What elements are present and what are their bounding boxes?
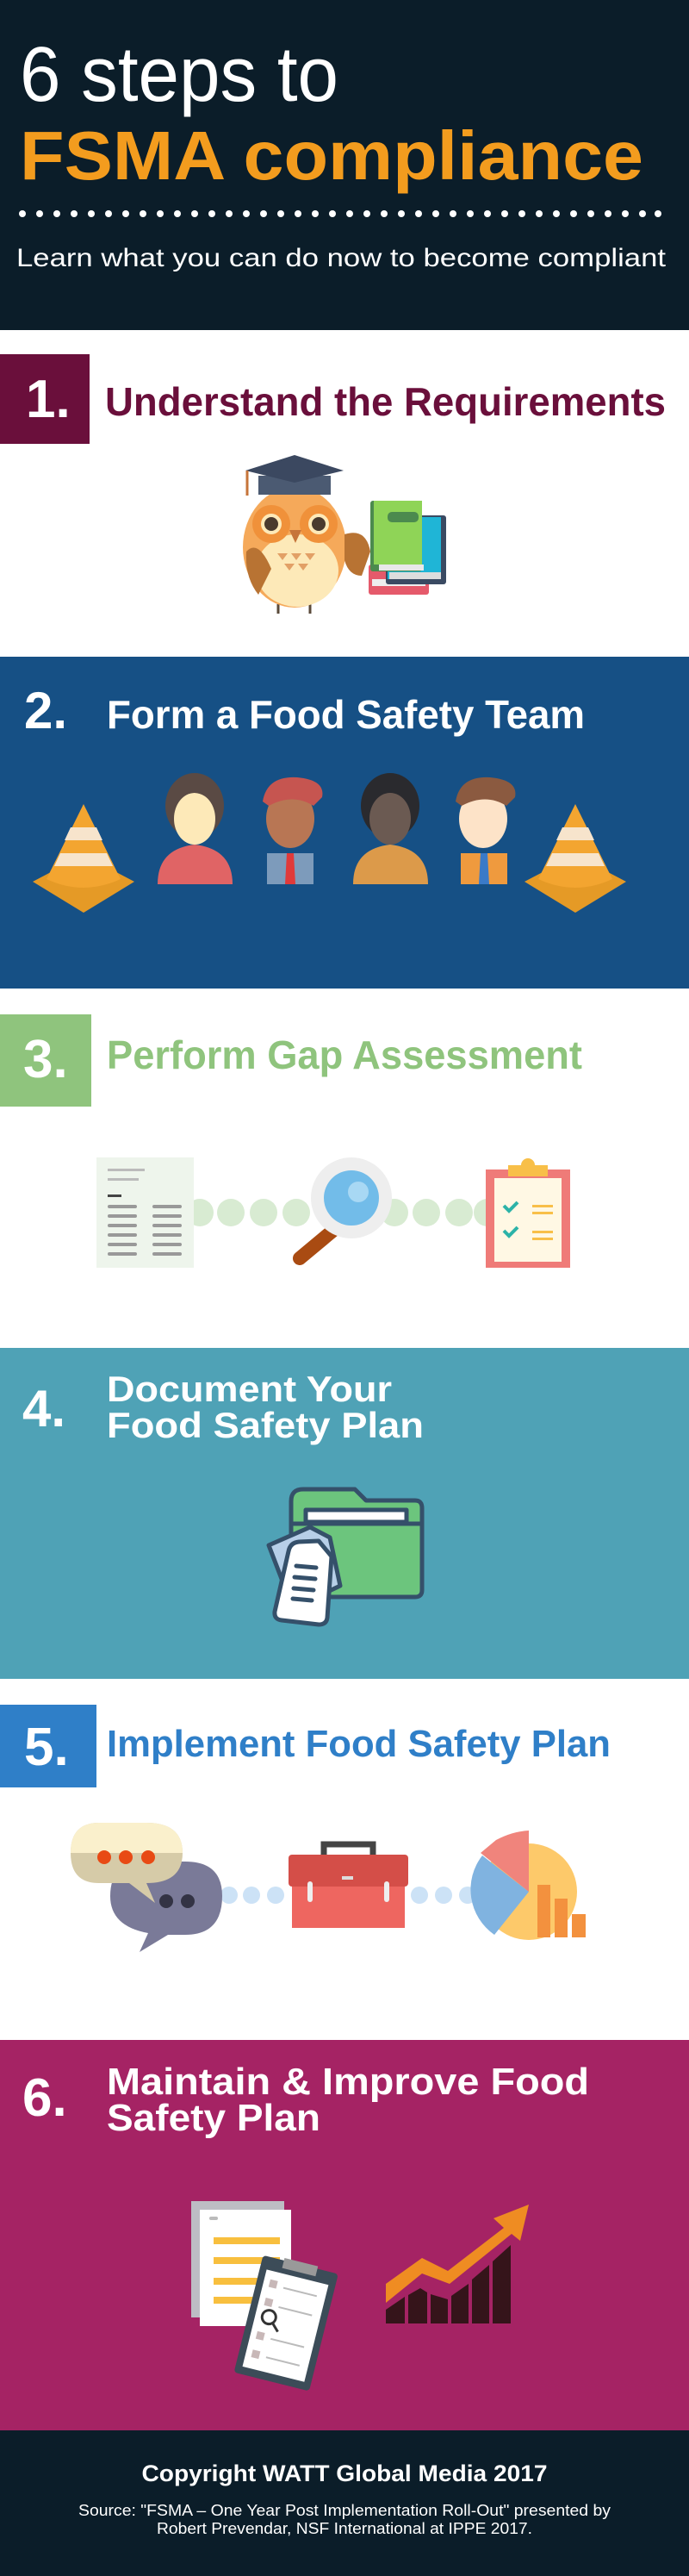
icon: woman 2 [353, 773, 428, 884]
heading 4: Document Your [107, 1369, 392, 1409]
dotted divider [19, 210, 661, 217]
icon: chat bubbles [71, 1823, 222, 1952]
icon: magnifier [300, 1157, 392, 1258]
header panel [0, 0, 689, 330]
icon: rising bar chart with arrow [386, 2205, 529, 2323]
heading 4 [22, 1369, 424, 1445]
heading 5: Implement Food Safety Plan [107, 1723, 611, 1765]
connector dots [186, 1199, 501, 1226]
panel: step 3 [0, 989, 689, 1348]
heading 2: 2. [24, 682, 67, 739]
step number box 3: 3. [23, 1030, 68, 1089]
title line 1: 6 steps to [20, 32, 338, 118]
icon: woman 1 [158, 773, 233, 884]
icon: man 2 [456, 777, 515, 884]
heading 4: Food Safety Plan [107, 1405, 424, 1445]
heading 6: 6. [22, 2068, 67, 2128]
heading 6: Safety Plan [107, 2097, 320, 2139]
panel: step 6 [0, 2040, 689, 2430]
icon: left cone [33, 804, 134, 913]
heading 4: 4. [22, 1380, 65, 1438]
icon: owl with graduation cap [243, 455, 370, 614]
step number box 5: 5. [24, 1718, 69, 1777]
icon: pie and bar chart [470, 1831, 586, 1940]
subtitle: Learn what you can do now to become compliant [16, 244, 667, 272]
heading 6: Maintain & Improve Food [107, 2061, 589, 2103]
panel: step 2 [0, 657, 689, 989]
step number box 1: 1. [26, 370, 71, 429]
heading 3: Perform Gap Assessment [107, 1032, 582, 1077]
panel: step 4 [0, 1348, 689, 1679]
icon: toolbox [289, 1844, 408, 1928]
icon: books [369, 501, 446, 595]
source text: Source: "FSMA – One Year Post Implementation Roll-Out" presented by [78, 2502, 611, 2519]
icon: right cone [525, 804, 626, 913]
panel: step 1 [0, 330, 689, 657]
step number box 5 [0, 1705, 96, 1787]
source text [78, 2502, 611, 2537]
step number box 3 [0, 1014, 91, 1107]
icon: documents and clipboard [191, 2201, 339, 2391]
heading 2: Form a Food Safety Team [107, 692, 585, 737]
copyright: Copyright WATT Global Media 2017 [141, 2461, 548, 2486]
heading 2 [24, 682, 585, 739]
heading 1: Understand the Requirements [105, 379, 666, 424]
icon: man 1 [263, 777, 322, 884]
panel: step 5 [0, 1679, 689, 2040]
title line 2: FSMA compliance [20, 117, 643, 194]
source text: Robert Prevendar, NSF International at IPPE 2017. [157, 2520, 532, 2537]
heading 6 [22, 2061, 589, 2139]
step number box 1 [0, 354, 90, 444]
icon: data sheet [96, 1157, 194, 1268]
footer [0, 2430, 689, 2576]
connector dots [220, 1887, 476, 1904]
icon: folder with documents [269, 1489, 422, 1625]
icon: clipboard checklist [486, 1158, 570, 1268]
